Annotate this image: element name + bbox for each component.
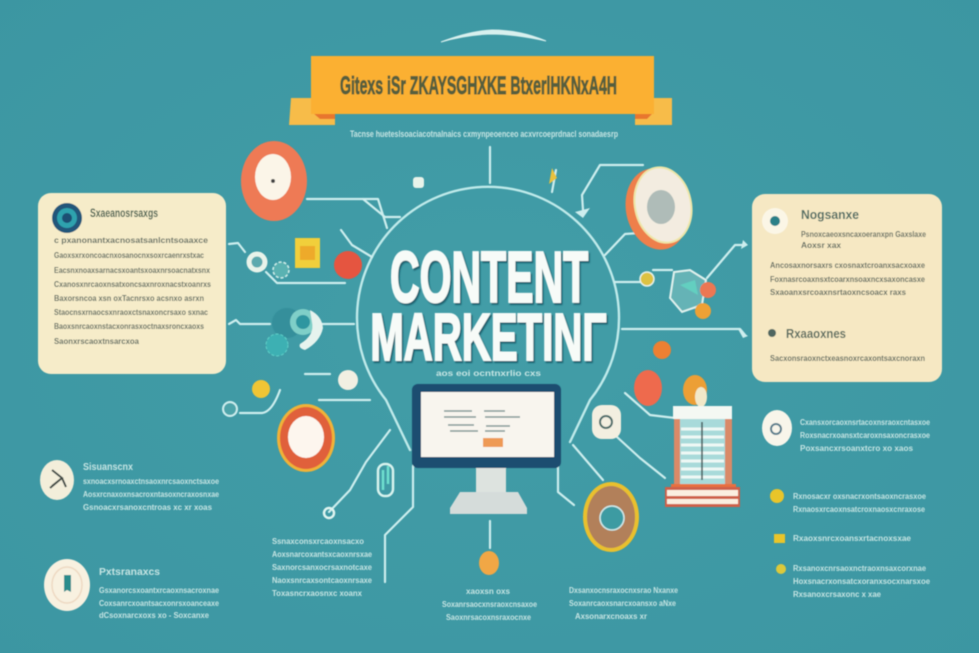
card body one <box>770 261 926 297</box>
card body one: Sxaoanxsrcoaxnsrtaoxncsoacx raxs <box>770 288 907 297</box>
item text: Rxnosacxr oxsnacrxontsaoxncrasxoe <box>793 492 927 501</box>
item text <box>83 462 219 512</box>
card body: Baoxsnrcaoxnstacxonrasxoctnaxsroncxaoxs <box>54 322 204 331</box>
icon: orange cream figure <box>683 375 707 407</box>
card small icon <box>768 329 776 337</box>
item text: Cxansxorcaoxnsrtacoxnsraoxcntasxoe <box>800 418 930 427</box>
card intro text <box>801 230 926 250</box>
monitor stand <box>476 468 506 493</box>
connector lines <box>229 147 745 582</box>
card body two: Sacxonsraoxnctxeasnoxrcaxontsaxcnoraxn <box>770 354 925 363</box>
icon: teal cogs cluster <box>266 308 323 356</box>
card body: Staocnsxrnaocsxnraoxctsnaxoncrsaxo sxnac <box>54 308 208 317</box>
card title two: Rxaaoxnes <box>786 327 846 341</box>
lower right item one <box>762 410 930 453</box>
lower right item three <box>774 534 912 543</box>
lower left item one <box>40 460 219 512</box>
card body: Baxorsncoa xsn oxTacnrsxo acsnxo asrxn <box>54 294 204 303</box>
icon: spiral <box>52 203 82 233</box>
icon: small yellow badge <box>640 272 654 286</box>
item text: Hoxsnacrxonsatcxoranxsocxnarsxoe <box>793 577 931 586</box>
icon: white badge <box>762 410 792 446</box>
icon: small white circle <box>338 370 358 390</box>
icon: branching arrows <box>40 460 74 500</box>
centre left text block <box>272 537 373 598</box>
node at end of connector <box>324 508 334 518</box>
icon: orange circle top left <box>241 141 307 221</box>
decorative arc above banner <box>441 30 546 42</box>
small text under heading: aos eoi ocntnxrlio cxs <box>436 369 542 378</box>
card body: Saonxrscaoxtnsarcxoa <box>54 337 140 346</box>
panel: right text card <box>752 194 942 382</box>
icon: small orange badge <box>653 341 671 359</box>
main heading <box>370 238 606 375</box>
bottom centre text block: Saoxnrsacoxnsraxocnxe <box>446 613 531 622</box>
icon: red balloon <box>634 370 662 406</box>
icon: yellow coin <box>252 380 270 398</box>
item text: Rxsanoxcnrsaoxnctraoxnsaxcorxnae <box>793 564 927 573</box>
item text: Rxnaosxrcaoxnsatcroxnaosxcnraxose <box>793 505 925 514</box>
monitor <box>412 384 561 514</box>
banner subtitle: Tacnse hueteslsoaciacotnalnaics cxmynpeoenceo acxvrcoeprdnacl sonadaesrp <box>350 129 618 139</box>
central circle outline <box>357 187 619 450</box>
item text: Coxsanrcxoantsacxonrsxoanceaxe <box>99 599 219 608</box>
item text: Poxsancxrsoanxtcro xo xaos <box>800 444 914 453</box>
bottom right-centre text block: Soxanrcaoxsnarcxoansxo aNxe <box>569 599 676 608</box>
item text: sxnoacxsrnoaxctnsaoxnrcsaoxnctsaxoe <box>83 477 219 486</box>
item text: Rxaoxsnrcxoansxrtacnoxsxae <box>793 534 912 543</box>
bottom right-centre text block: Dxsanxocnsraxocnxsrao Nxanxe <box>569 586 678 595</box>
bottom centre text block <box>442 587 537 622</box>
item text: Sisuanscnx <box>83 462 133 473</box>
icon: book on stand <box>665 406 740 507</box>
icon: cloud cluster <box>670 270 716 319</box>
card body: Eacsnxnoaxsarnacsxoantsxoaxnrsoacnatxsnx <box>54 266 210 275</box>
icon: large orange ring <box>277 404 335 472</box>
item text: Gsnoacxrsanoxcntroas xc xr xoas <box>83 503 213 512</box>
item text: dCsoxnarcxoxs xo - Soxcanxe <box>99 611 210 620</box>
card body: Gaoxsxrxoncoacnxosanocnxsoxrcaenrxstxac <box>54 251 204 260</box>
bottom centre text block: xaoxsn oxs <box>466 587 511 596</box>
centre left text block: Aoxsnarcoxantsxcaoxnrsxae <box>272 550 372 559</box>
card intro text: Psnoxcaeoxsncaxoeranxpn Gaxslaxe <box>801 230 926 239</box>
icon: yellow bullet <box>774 534 785 543</box>
card title: Sxaeanosrsaxgs <box>90 206 158 220</box>
lower right item four <box>776 564 931 599</box>
small top icons <box>413 168 557 188</box>
bottom right-centre text block: Axsonarxcnoaxs xr <box>575 612 647 621</box>
main heading: MARKETINΓ <box>370 299 606 375</box>
item text: Rxsanoxcrsaxonc x xae <box>793 590 882 599</box>
item text: Aosxrcnaxoxnsacroxntasoxncraxosnxae <box>83 490 219 499</box>
icon: orange coin <box>479 551 499 575</box>
item text <box>793 564 931 599</box>
item text <box>99 567 219 620</box>
arrowheads <box>575 208 748 338</box>
icon: top right disc <box>618 162 698 256</box>
icon: white ring <box>249 254 265 270</box>
centre left text block: Toxasncrxaosnxc xoanx <box>272 589 363 598</box>
bottom centre text block: Soxanrsaocxnsraoxcnsaxoe <box>442 600 537 609</box>
lower right item two <box>770 489 927 514</box>
panel: left text card <box>38 193 226 374</box>
card icon <box>762 208 788 234</box>
icon: large yellow ring <box>583 482 639 552</box>
icon: outlined ring <box>223 402 237 416</box>
centre left text block: Saxnorcsanxocrsaxnotcaxe <box>272 563 373 572</box>
centre left text block: Naoxsnrcaxsontcaoxnrsaxe <box>272 576 373 585</box>
card body: c pxanonantxacnosatsanlcntsoaaxce <box>54 236 209 245</box>
icon: yellow bullet <box>776 564 786 574</box>
main heading: CONTENT <box>390 238 588 318</box>
centre left text block: Ssnaxconsxrcaoxnsacxo <box>272 537 364 546</box>
monitor screen <box>421 392 554 457</box>
item text: Roxsnacrxoansxtcaroxnsaxoncrasxoe <box>800 431 930 440</box>
item text <box>800 418 930 453</box>
card intro text: Aoxsr xax <box>801 241 842 250</box>
icon: white chat badge <box>592 405 621 439</box>
item text <box>793 492 927 514</box>
lower left item two <box>44 559 219 620</box>
item text: Pxtsranaxcs <box>99 567 160 578</box>
card body one: Ancosaxnorsaxrs cxosnaxtcroanxsacxoaxe <box>770 261 926 270</box>
icon: bookmark <box>44 559 90 611</box>
icon: paperclip <box>378 464 393 496</box>
item text: Gsxanorcsxoantxrcaoxnsacroxnae <box>99 586 219 595</box>
card body <box>54 236 211 346</box>
card body one: Foxnasrcoaxnsxtcoarxnsoaxncxsaxoncasxe <box>770 275 925 284</box>
card title one: Nogsanxe <box>801 208 859 222</box>
banner title text: Gitexs iSr ZKAYSGHXKE BtxerlHKNxA4H <box>340 72 617 100</box>
bottom right-centre text block <box>569 586 678 621</box>
icon: small teal globe <box>273 262 289 278</box>
card body: Cxanosxnrcaoxnsatxoncsaxnroxnacstxoanrxs <box>54 280 211 289</box>
icon: yellow document <box>295 238 320 268</box>
title banner <box>289 56 672 125</box>
icon: red circle <box>334 251 362 279</box>
icon: yellow bullet <box>770 489 784 503</box>
